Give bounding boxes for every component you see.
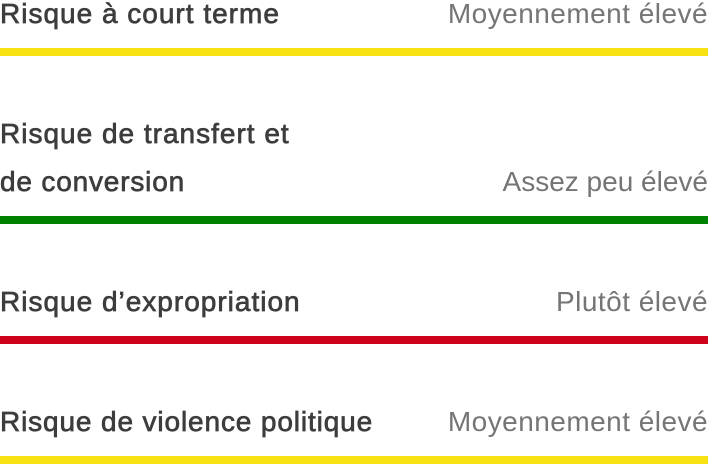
label: expropriation risk: Risque d’expropriation [0,286,301,317]
value: expropriation risk rating: Plutôt élevé [556,286,708,317]
row: expropriation risk [0,286,708,344]
bar: red [0,336,708,344]
label: political violence risk: Risque de violence politique [0,406,373,437]
label: transfer and conversion risk: de conversion [0,166,185,197]
label: transfer and conversion risk: Risque de transfert et [0,118,290,149]
row: short-term risk [0,0,708,56]
value: political violence risk rating: Moyennement élevé [448,406,708,437]
row: political violence risk [0,406,708,464]
bar: yellow [0,48,708,56]
bar: yellow [0,456,708,464]
value: transfer risk rating: Assez peu élevé [503,166,708,197]
bar: green [0,216,708,224]
label: transfer and conversion risk [0,118,290,197]
row: transfer and conversion risk [0,118,708,224]
